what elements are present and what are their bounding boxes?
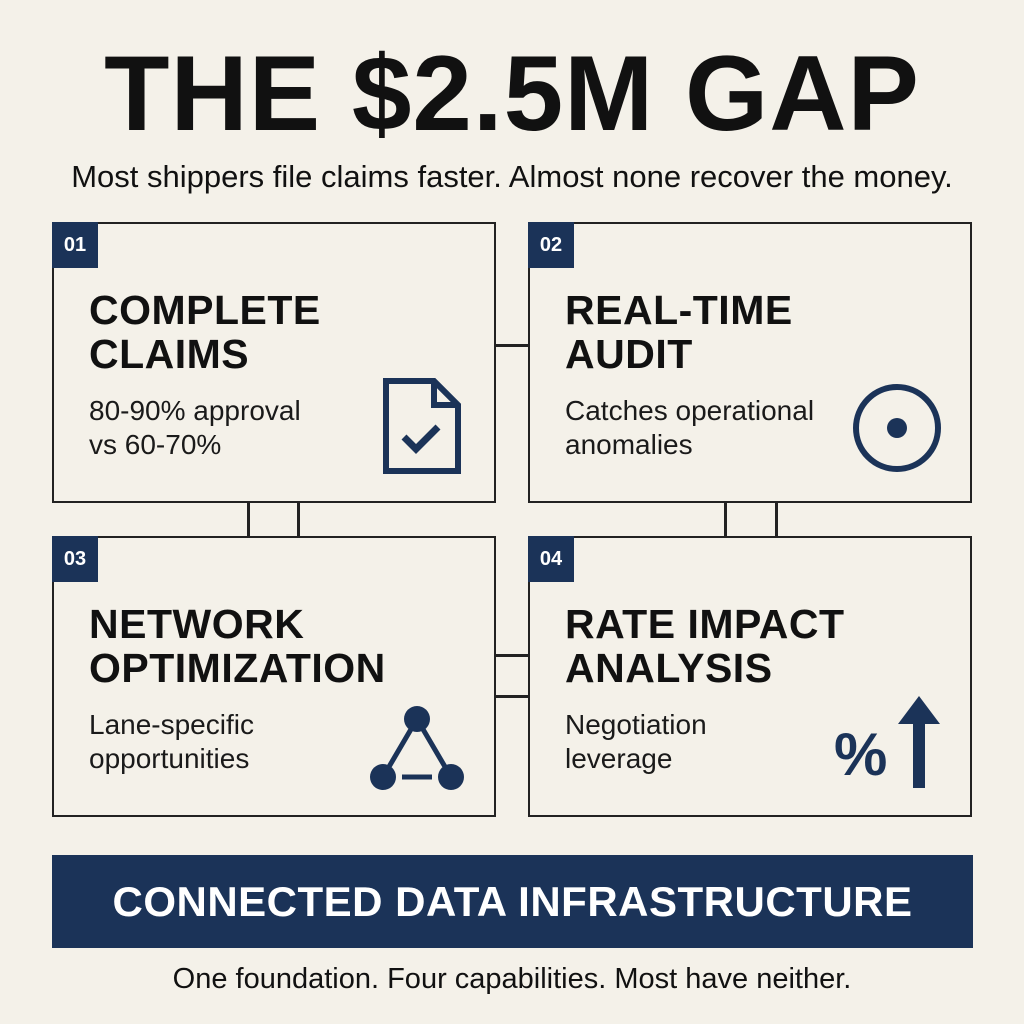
panel: 03 network optimization: Lane-specific xyxy=(89,709,254,740)
footer tagline: One foundation. Four capabilities. Most have neither. xyxy=(173,963,851,995)
icon: percent up arrow xyxy=(834,696,940,788)
panel: 04 rate impact analysis: leverage xyxy=(565,743,672,774)
footer banner xyxy=(52,855,973,948)
panel: 02 real-time audit: REAL-TIME xyxy=(565,287,793,333)
icon: network nodes xyxy=(370,706,464,790)
panel: 02 real-time audit xyxy=(528,222,972,503)
panel: 01 complete claims: 80-90% approval xyxy=(89,395,301,426)
panel: 01 complete claims: vs 60-70% xyxy=(89,429,221,460)
panel: 03 network optimization: opportunities xyxy=(89,743,249,774)
panel: 02 real-time audit: 02 xyxy=(540,234,562,256)
panel: 03 network optimization: OPTIMIZATION xyxy=(89,645,386,691)
panel: 02 real-time audit: AUDIT xyxy=(565,331,693,377)
panel: 04 rate impact analysis xyxy=(528,536,972,817)
panel: 01 complete claims xyxy=(52,222,496,503)
panel: 03 network optimization xyxy=(52,536,496,817)
panel: 02 real-time audit: Catches operational xyxy=(565,395,814,426)
title: THE $2.5M GAP xyxy=(104,33,920,153)
panel: 01 complete claims: CLAIMS xyxy=(89,331,249,377)
footer banner: CONNECTED DATA INFRASTRUCTURE xyxy=(112,878,912,925)
icon: target xyxy=(853,384,941,472)
panel: 01 complete claims: 01 xyxy=(64,234,86,256)
panel: 01 complete claims: COMPLETE xyxy=(89,287,321,333)
icon: percent up arrow: % xyxy=(834,721,887,788)
panel: 02 real-time audit: anomalies xyxy=(565,429,693,460)
icon: document check xyxy=(383,378,461,474)
panel: 03 network optimization: 03 xyxy=(64,548,86,570)
subtitle: Most shippers file claims faster. Almost none recover the money. xyxy=(71,159,953,194)
panel: 04 rate impact analysis: 04 xyxy=(540,548,562,570)
panel: 04 rate impact analysis: RATE IMPACT xyxy=(565,601,845,647)
panel: 04 rate impact analysis: Negotiation xyxy=(565,709,707,740)
panel: 03 network optimization: NETWORK xyxy=(89,601,304,647)
panel: 04 rate impact analysis: ANALYSIS xyxy=(565,645,773,691)
